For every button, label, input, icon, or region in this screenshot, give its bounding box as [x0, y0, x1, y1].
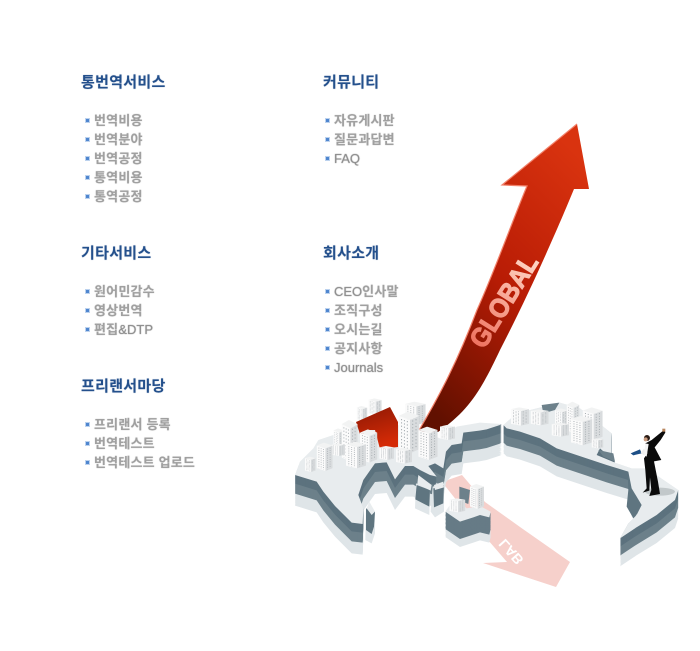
heading: 프리랜서마당: 프리랜서마당 [81, 378, 166, 395]
menu list: 프리랜서마당: 프리랜서 등록 [94, 417, 171, 432]
menu list: 통번역서비스 [85, 113, 143, 204]
heading: 커뮤니티: 커뮤니티 [323, 74, 379, 91]
menu list: 회사소개: 조직구성 [334, 303, 383, 318]
map: Africa and Eurasia [295, 423, 502, 555]
businessman figure [631, 429, 675, 496]
menu list: 기타서비스 [85, 284, 155, 337]
heading: 회사소개: 회사소개 [323, 245, 379, 262]
menu list: 프리랜서마당 [85, 417, 195, 470]
menu list: 통번역서비스: 통역공정 [94, 189, 143, 204]
menu list: 기타서비스: 영상번역 [94, 303, 143, 318]
menu list: 기타서비스: 원어민감수 [94, 284, 155, 299]
big red arrow [418, 124, 589, 432]
buildings: back row [357, 398, 426, 425]
menu list: 프리랜서마당: 번역테스트 업로드 [94, 455, 195, 470]
map: the Americas [503, 403, 678, 566]
map: islands and Australia [365, 475, 491, 547]
buildings: Asia cluster [305, 412, 484, 512]
menu list: 커뮤니티: 자유게시판 [334, 113, 395, 128]
buildings: America cluster [511, 402, 603, 448]
menu list: 커뮤니티: FAQ [334, 151, 360, 166]
menu list: 회사소개: Journals [334, 360, 383, 375]
menu list: 기타서비스: 편집&DTP [94, 322, 153, 337]
heading: 기타서비스: 기타서비스 [81, 245, 152, 262]
menu list: 커뮤니티 [325, 113, 395, 166]
menu list: 회사소개 [325, 284, 399, 375]
menu list: 회사소개: 오시는길 [334, 322, 383, 337]
menu list: 회사소개: 공지사항 [334, 341, 383, 356]
heading: 통번역서비스: 통번역서비스 [81, 74, 166, 91]
arrow label: GLOBAL [464, 249, 544, 353]
menu list: 통번역서비스: 번역비용 [94, 113, 143, 128]
menu list: 프리랜서마당: 번역테스트 [94, 436, 155, 451]
menu list: 커뮤니티: 질문과답변 [334, 132, 395, 147]
short red arrow stub [356, 407, 398, 449]
reflected pale arrow [442, 475, 570, 587]
menu list: 통번역서비스: 번역공정 [94, 151, 143, 166]
menu list: 회사소개: CEO인사말 [334, 284, 399, 299]
reflected pale arrow: LAB [495, 536, 526, 568]
menu list: 통번역서비스: 번역분야 [94, 132, 143, 147]
menu list: 통번역서비스: 통역비용 [94, 170, 143, 185]
